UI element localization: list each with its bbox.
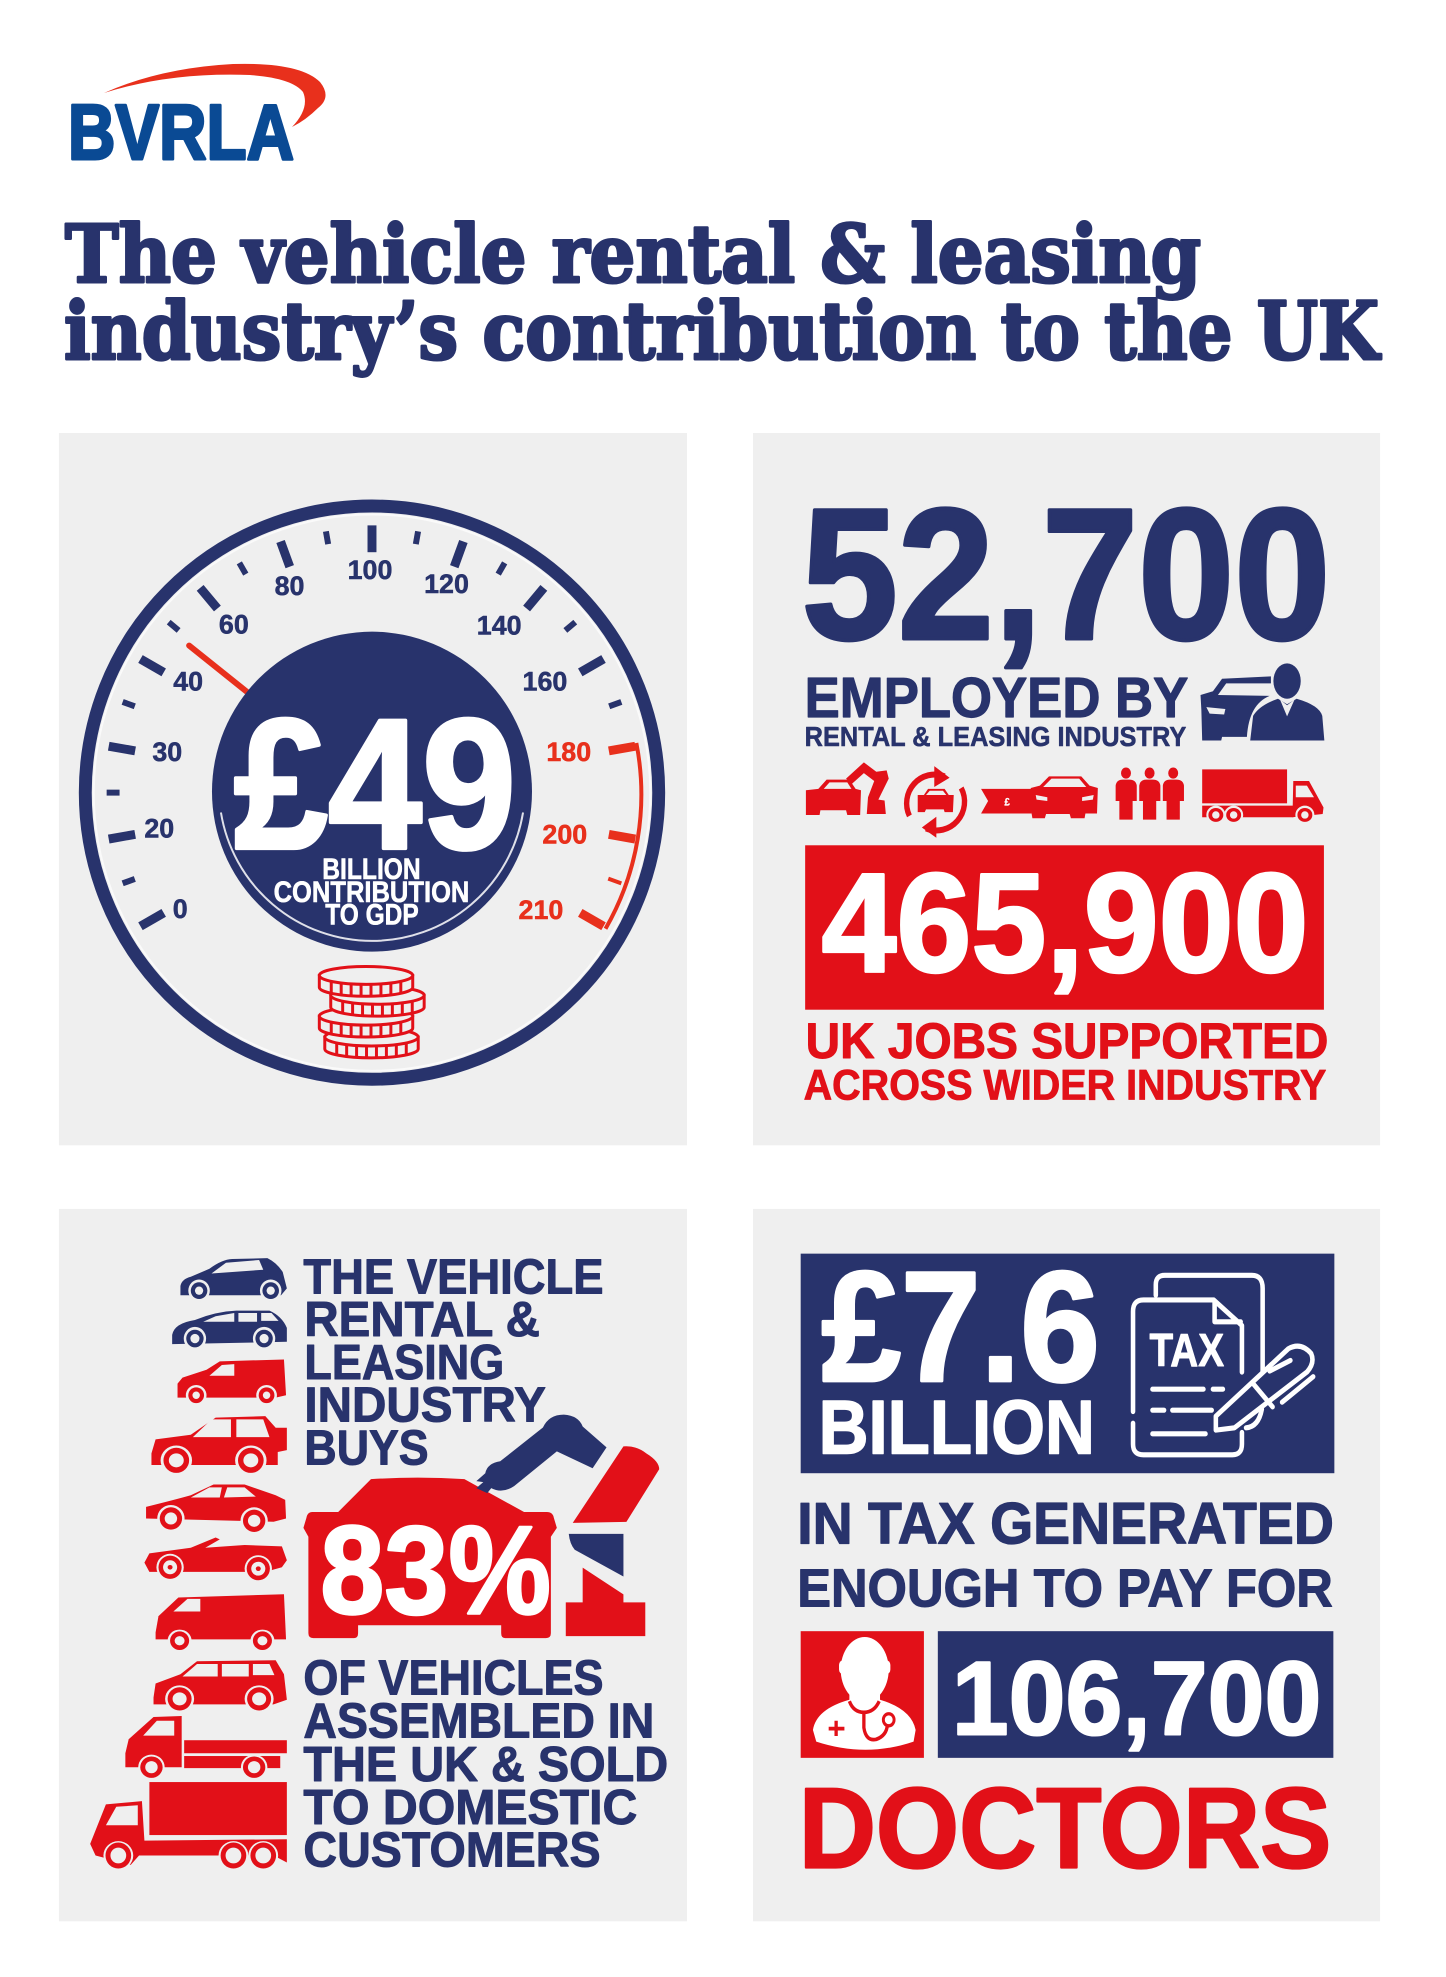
BVRLA logo: BVRLA bbox=[68, 88, 294, 176]
purchases intro text: LEASING bbox=[304, 1336, 504, 1390]
tax caption: IN TAX GENERATED bbox=[797, 1492, 1334, 1557]
jobs supported caption bbox=[804, 1013, 1328, 1110]
icon: people carrier bbox=[154, 1660, 287, 1712]
gauge speed labels: 200 bbox=[542, 819, 587, 849]
centre disc with GDP figure bbox=[212, 632, 532, 952]
icon: car in replacement cycle bbox=[907, 766, 965, 838]
tax amount box: BILLION bbox=[819, 1385, 1095, 1470]
icon: car with robot arm and 83 percent: 83% bbox=[320, 1500, 551, 1640]
icon: tax document and pen: TAX bbox=[1150, 1324, 1224, 1376]
gauge speed labels: 30 bbox=[152, 737, 182, 767]
gauge speed labels: 60 bbox=[219, 610, 249, 640]
vehicle stack bbox=[90, 1258, 287, 1870]
gauge needle bbox=[189, 646, 249, 693]
gauge speed labels: 160 bbox=[523, 666, 567, 696]
jobs supported box: 465,900 bbox=[822, 843, 1309, 1001]
icon: delivery truck bbox=[1202, 769, 1324, 824]
gauge speed labels: 140 bbox=[477, 611, 522, 641]
purchases detail text: CUSTOMERS bbox=[303, 1824, 601, 1878]
gauge dial bbox=[85, 506, 659, 1079]
panel: employment bbox=[753, 433, 1380, 1145]
gauge speed labels: 20 bbox=[144, 813, 174, 843]
purchases detail text: ASSEMBLED IN bbox=[303, 1694, 654, 1748]
purchases detail text: OF VEHICLES bbox=[303, 1652, 604, 1706]
jobs supported caption: UK JOBS SUPPORTED bbox=[806, 1013, 1328, 1069]
icon: tax document and pen bbox=[1133, 1275, 1313, 1455]
purchases intro text: INDUSTRY bbox=[304, 1379, 546, 1433]
icon: car with pound ribbon: £ bbox=[1004, 796, 1010, 809]
gauge speed labels: 180 bbox=[546, 737, 591, 767]
icon: doctor bbox=[801, 1631, 924, 1758]
purchases intro text: BUYS bbox=[304, 1421, 429, 1475]
icon: saloon bbox=[146, 1485, 286, 1534]
icon: small van bbox=[178, 1359, 286, 1405]
icon: convertible bbox=[144, 1538, 287, 1582]
panel: GDP speedometer bbox=[59, 433, 687, 1145]
panel: tax bbox=[753, 1209, 1380, 1921]
icon: box lorry bbox=[90, 1782, 287, 1870]
employed headline number: 52,700 bbox=[802, 470, 1330, 679]
employed caption: EMPLOYED BY bbox=[805, 667, 1188, 730]
jobs supported caption: ACROSS WIDER INDUSTRY bbox=[804, 1062, 1326, 1110]
icon: car with pound ribbon bbox=[981, 776, 1098, 818]
gauge speed labels: 0 bbox=[173, 894, 188, 924]
panel: vehicle purchases bbox=[59, 1209, 687, 1921]
centre disc with GDP figure: TO GDP bbox=[325, 899, 419, 932]
title: The vehicle rental & leasing bbox=[65, 207, 1201, 301]
purchases intro text: RENTAL & bbox=[304, 1293, 540, 1347]
icon: flatbed truck bbox=[125, 1716, 287, 1780]
purchases intro text bbox=[303, 1250, 604, 1475]
icon: SUV bbox=[151, 1416, 287, 1475]
icon row: wider industry bbox=[806, 762, 1324, 838]
icon: coin stack bbox=[319, 966, 424, 1058]
gauge speed labels: 40 bbox=[173, 666, 203, 696]
gauge speed labels: 80 bbox=[275, 571, 304, 601]
doctors label: DOCTORS bbox=[799, 1766, 1331, 1893]
tax caption bbox=[797, 1492, 1334, 1618]
tax amount box bbox=[801, 1240, 1334, 1473]
tax caption: ENOUGH TO PAY FOR bbox=[797, 1558, 1333, 1618]
tax amount box: £7.6 bbox=[822, 1240, 1100, 1415]
centre disc with GDP figure: BILLION bbox=[322, 853, 421, 886]
purchases detail text: THE UK & SOLD bbox=[303, 1738, 668, 1792]
centre disc with GDP figure: £49 bbox=[234, 681, 516, 888]
icon: three workers bbox=[1116, 768, 1184, 820]
icon: robot arm assembling car bbox=[806, 762, 889, 815]
gauge speed labels bbox=[144, 555, 591, 925]
gauge speed labels: 120 bbox=[424, 569, 469, 599]
icon: car and businessman bbox=[1201, 663, 1324, 741]
purchases detail text bbox=[303, 1652, 668, 1878]
icon: car with robot arm and 83 percent bbox=[303, 1415, 659, 1640]
icon: hatchback bbox=[180, 1258, 287, 1302]
gauge speed labels: 100 bbox=[348, 555, 392, 585]
purchases intro text: THE VEHICLE bbox=[303, 1250, 604, 1304]
icon: panel van bbox=[156, 1594, 286, 1652]
purchases detail text: TO DOMESTIC bbox=[303, 1781, 637, 1835]
gauge speed labels: 210 bbox=[519, 895, 563, 925]
title bbox=[64, 207, 1381, 378]
robot arm bbox=[476, 1415, 659, 1636]
icon: estate car bbox=[172, 1311, 287, 1350]
centre disc with GDP figure: CONTRIBUTION bbox=[274, 876, 469, 909]
employed caption: RENTAL & LEASING INDUSTRY bbox=[805, 721, 1187, 752]
doctors count box: 106,700 bbox=[952, 1641, 1321, 1757]
